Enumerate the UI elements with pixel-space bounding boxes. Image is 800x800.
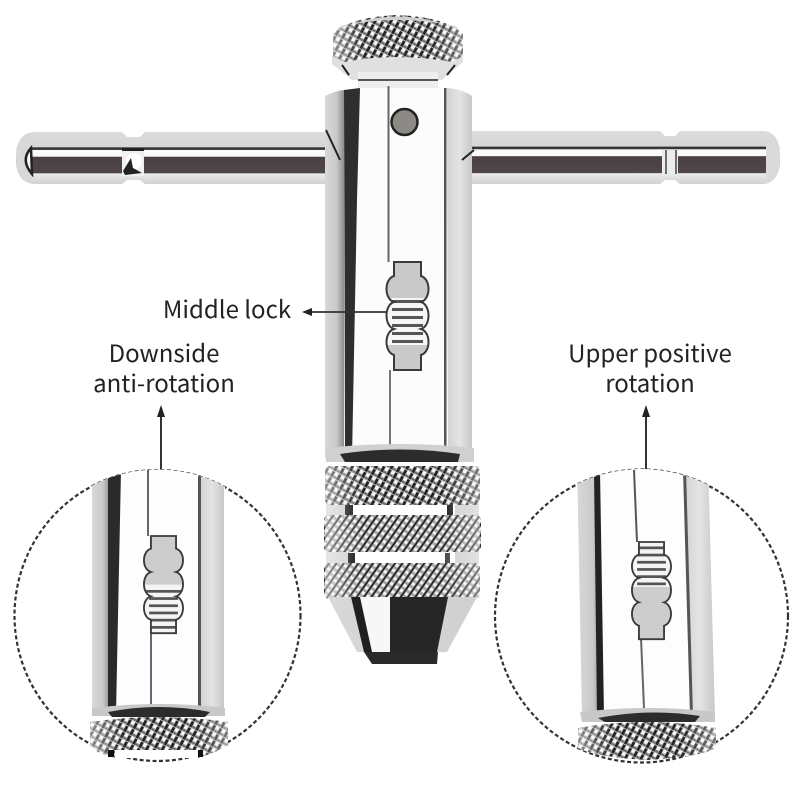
dashed circle outline right: [495, 470, 788, 762]
arrow: downside pointer: [157, 405, 165, 473]
main slot: middle lock position: [386, 261, 430, 371]
top knurled knob: [332, 15, 463, 88]
label: Upper positive rotation: rotation: [605, 364, 695, 399]
left T-bar handle: [16, 132, 335, 184]
label: Downside anti-rotation: anti-rotation: [93, 364, 235, 399]
main barrel: [325, 86, 474, 462]
inset knurled ring right: [578, 722, 716, 760]
panel: downside inset circle: [14, 460, 300, 761]
label: Middle lock: Middle lock: [163, 290, 291, 325]
dashed circle outline left: [14, 470, 300, 761]
arrow: upper positive pointer: [642, 405, 650, 470]
label: Downside anti-rotation: Downside: [109, 334, 219, 369]
label: Upper positive rotation: Upper positive: [568, 334, 732, 369]
label: Upper positive rotation: [568, 334, 732, 399]
arrow: middle lock pointer: [302, 308, 387, 316]
inset barrel right: [577, 460, 715, 722]
label: Downside anti-rotation: [93, 334, 235, 399]
inset knurled ring left: [90, 717, 228, 758]
collar with three knurled rings: [324, 466, 481, 599]
panel: upper positive inset circle: [495, 460, 788, 762]
inset slot right: [629, 542, 675, 639]
inset barrel left: [92, 460, 225, 717]
inset slot left: [141, 536, 187, 633]
chuck nose: [328, 597, 477, 664]
right T-bar handle: [465, 131, 780, 184]
